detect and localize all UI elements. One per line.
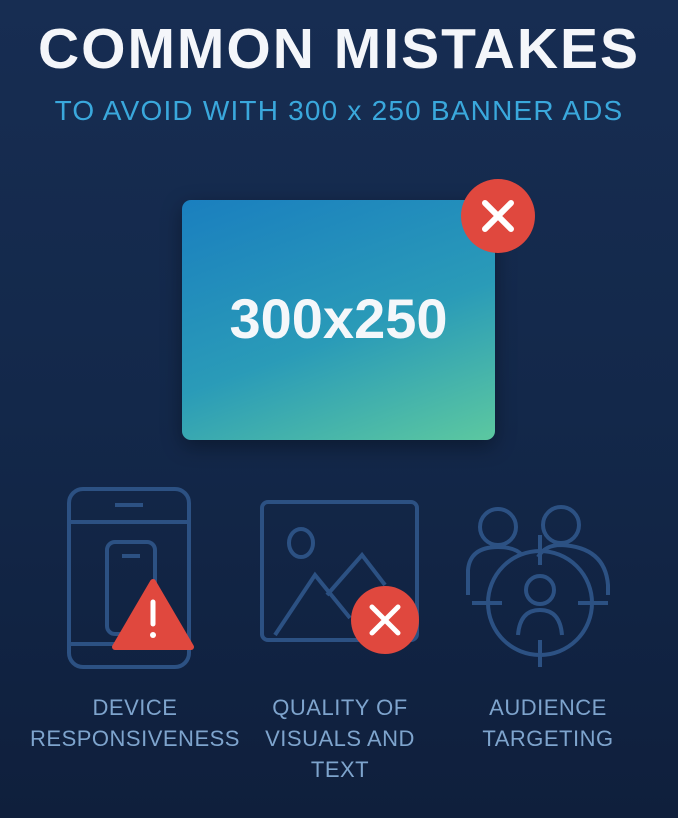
- title: COMMON MISTAKES: [38, 17, 640, 81]
- subtitle: TO AVOID WITH 300 x 250 BANNER ADS: [55, 95, 623, 126]
- label: audience targeting: AUDIENCE: [489, 695, 607, 720]
- label: audience targeting: TARGETING: [482, 726, 614, 751]
- icon: image with error: [260, 500, 419, 654]
- banner ad mockup: [182, 200, 495, 440]
- label: audience targeting: [482, 695, 614, 751]
- icon: phone with warning: [67, 487, 194, 669]
- label: quality of visuals: [265, 695, 415, 782]
- banner label: 300x250: [229, 287, 448, 350]
- label: quality of visuals: QUALITY OF: [272, 695, 408, 720]
- icon: red close badge: [461, 179, 535, 253]
- label: device responsiveness: DEVICE: [93, 695, 177, 720]
- label: quality of visuals: VISUALS AND: [265, 726, 415, 751]
- label: quality of visuals: TEXT: [311, 757, 369, 782]
- label: device responsiveness: RESPONSIVENESS: [30, 726, 240, 751]
- label: device responsiveness: [30, 695, 240, 751]
- icon: audience target: [466, 505, 610, 667]
